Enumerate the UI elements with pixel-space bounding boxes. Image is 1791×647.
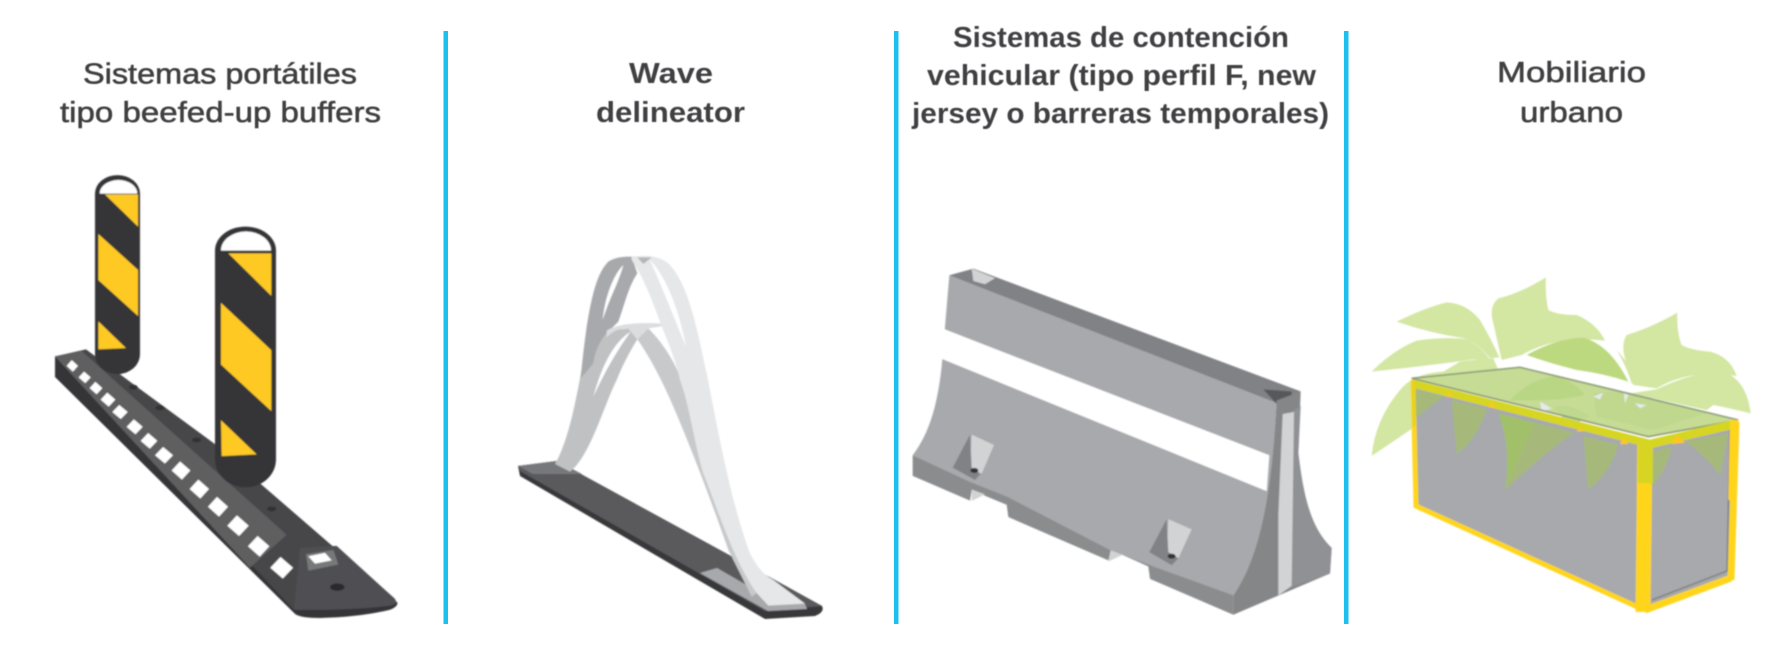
end cap — [294, 546, 396, 610]
illustration: planter with plants — [1372, 277, 1751, 612]
anchor notch 2 — [1167, 519, 1192, 558]
reflective strip — [55, 351, 287, 568]
planter faces — [1414, 380, 1640, 608]
upper left band — [581, 257, 637, 378]
upper right band — [632, 256, 805, 606]
glass top and hanging leaves — [1412, 367, 1738, 500]
yellow lower frame — [1413, 380, 1736, 612]
heading: Mobiliario urbano: Mobiliario — [1497, 57, 1646, 89]
post 2 — [215, 227, 276, 487]
base — [518, 461, 823, 619]
white square reflectors — [67, 360, 293, 578]
heading: Wave delineator — [596, 58, 745, 129]
heading: Sistemas portátiles tipo beefed-up buffers: tipo beefed-up buffers — [60, 97, 381, 129]
base side — [913, 455, 1233, 615]
heading: Mobiliario urbano — [1497, 57, 1646, 129]
heading: Mobiliario urbano: urbano — [1520, 97, 1623, 129]
top face — [949, 269, 1301, 403]
heading: Sistemas de contención vehicular: jersey o barreras temporales) — [911, 98, 1329, 130]
illustration: wave delineator — [518, 256, 823, 619]
heading: Wave delineator: delineator — [596, 97, 745, 129]
heading: Sistemas portátiles tipo beefed-up buffers — [60, 58, 381, 129]
illustration: concrete barrier — [913, 269, 1332, 615]
front face — [913, 275, 1277, 595]
connector — [607, 323, 664, 339]
end face — [1233, 391, 1332, 615]
heading: Sistemas de contención vehicular — [911, 22, 1329, 130]
post 1 — [95, 175, 140, 374]
heading: Wave delineator: Wave — [629, 58, 713, 90]
divider: panel 3 / panel 4 — [1344, 31, 1348, 624]
base side — [55, 356, 397, 618]
reflective white stripe — [937, 328, 1269, 491]
heading: Sistemas de contención vehicular: Sistemas de contención — [953, 22, 1289, 54]
divider: panel 1 / panel 2 — [444, 31, 448, 624]
heading: Sistemas de contención vehicular: vehicular (tipo perfil F, new — [927, 60, 1316, 92]
illustration: beefed-up buffer with two posts — [55, 175, 397, 618]
base top — [55, 349, 396, 610]
glass-tinted rails — [1412, 380, 1735, 483]
lower left band — [555, 328, 637, 472]
leaves — [1372, 277, 1751, 456]
heading: Sistemas portátiles tipo beefed-up buffers: Sistemas portátiles — [83, 58, 357, 90]
lower right band — [637, 328, 757, 597]
anchor notch 1 — [970, 435, 994, 474]
divider: panel 2 / panel 3 — [894, 31, 898, 624]
